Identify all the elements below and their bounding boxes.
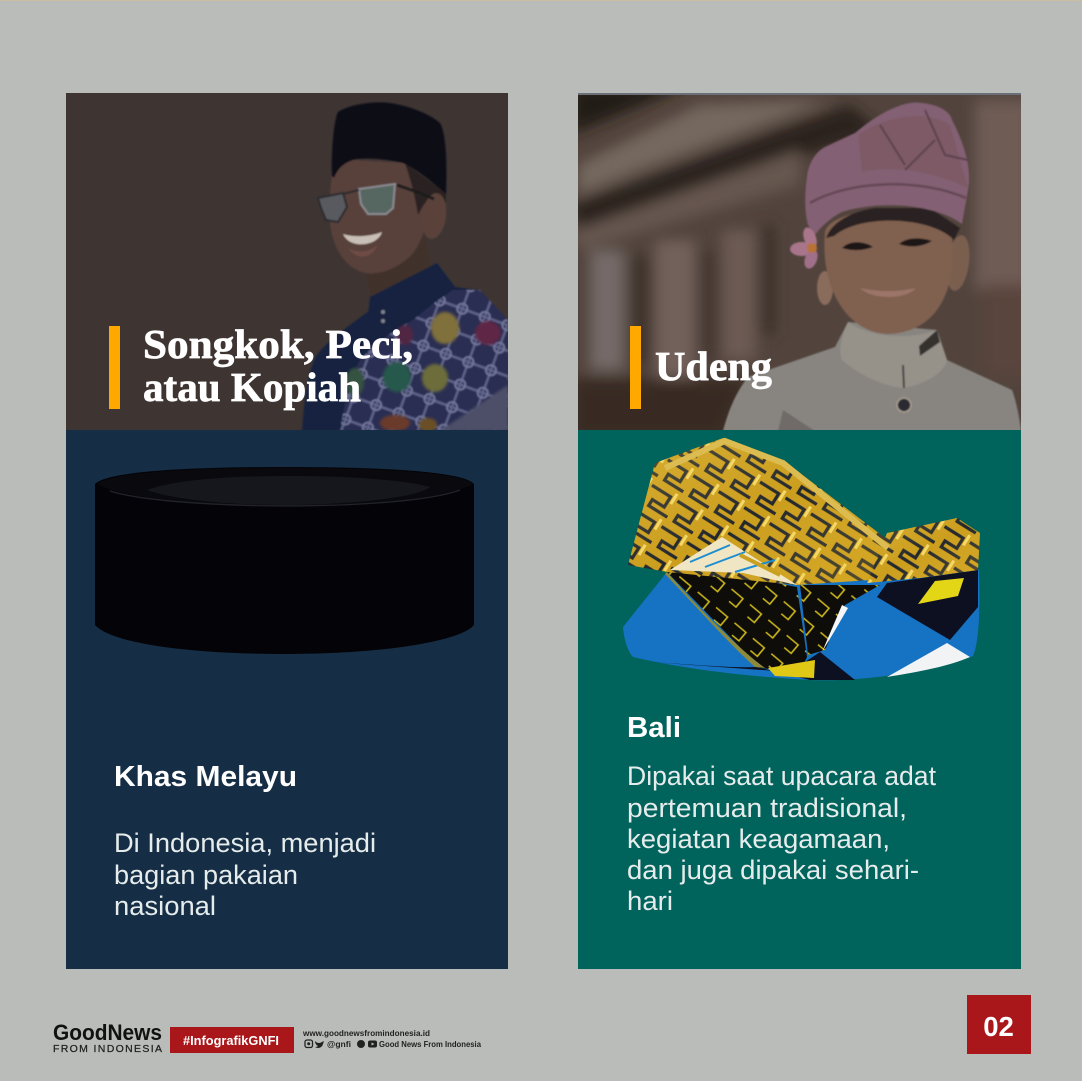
panel: udeng — [570, 85, 1031, 969]
heading: atau Kopiah — [143, 364, 361, 410]
footer — [53, 995, 1031, 1055]
panel: songkok — [66, 93, 508, 969]
text: bali: Bali — [627, 712, 681, 744]
illustration: udeng headdress — [623, 438, 980, 680]
accent bar — [109, 326, 120, 409]
text: description udeng: Dipakai saat upacara adat — [627, 761, 937, 791]
icon: youtube — [368, 1040, 377, 1048]
heading: Udeng — [655, 343, 773, 389]
page number badge — [967, 995, 1031, 1054]
photo: man wearing songkok — [66, 93, 508, 432]
text: description songkok — [114, 828, 376, 921]
website and social handles — [302, 1029, 482, 1049]
heading — [143, 321, 413, 410]
panel body — [66, 430, 508, 969]
hashtag badge: #InfografikGNFI — [183, 1034, 279, 1048]
website and social handles: Good News From Indonesia — [379, 1040, 482, 1049]
text: description songkok: Di Indonesia, menjadi — [114, 828, 376, 858]
illustration: black songkok cap — [95, 467, 474, 654]
text: description udeng: kegiatan keagamaan, — [627, 824, 890, 854]
heading: Songkok, Peci, — [143, 321, 413, 367]
page number badge: 02 — [983, 1011, 1014, 1042]
icon: twitter — [315, 1041, 324, 1048]
icon: facebook — [357, 1040, 365, 1048]
logo: GoodNews from Indonesia: FROM INDONESIA — [53, 1043, 162, 1055]
logo: GoodNews from Indonesia: GoodNews — [53, 1020, 162, 1045]
logo: GoodNews from Indonesia — [53, 1020, 162, 1055]
website and social handles: www.goodnewsfromindonesia.id — [302, 1029, 430, 1038]
text: description songkok: nasional — [114, 891, 216, 921]
icon: instagram — [305, 1040, 312, 1048]
text: description udeng: pertemuan tradisional, — [627, 793, 907, 823]
photo: boy wearing udeng — [570, 85, 1031, 440]
text: description udeng: hari — [627, 886, 673, 916]
panel body — [578, 430, 1021, 969]
website and social handles: @gnfi — [327, 1040, 351, 1049]
hashtag badge — [170, 1027, 294, 1053]
text: khas melayu: Khas Melayu — [114, 761, 297, 793]
accent bar — [630, 326, 641, 409]
text: description songkok: bagian pakaian — [114, 860, 298, 890]
text: description udeng — [627, 761, 937, 916]
text: description udeng: dan juga dipakai sehari- — [627, 855, 919, 885]
